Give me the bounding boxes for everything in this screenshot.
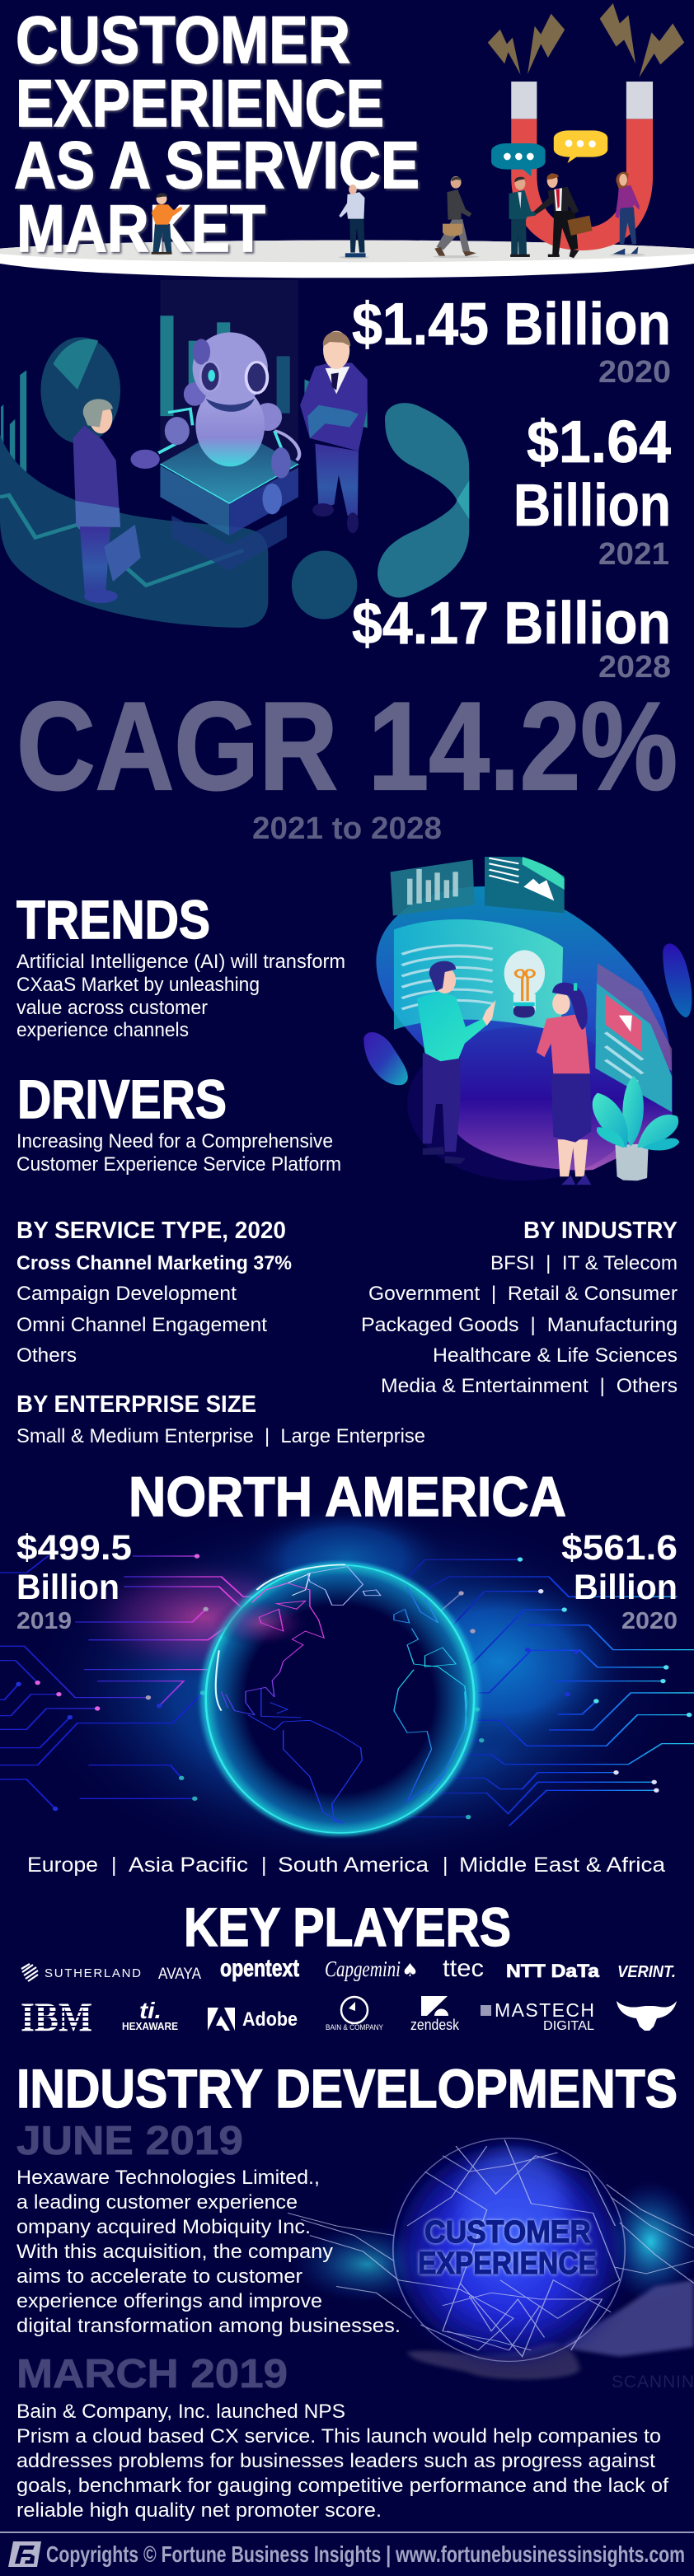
image text: customer experience (418, 2215, 597, 2281)
other regions list: Asia Pacific (129, 1854, 248, 1877)
person: left businessman with briefcase (73, 399, 141, 603)
header illustration: business people and speech bubbles (150, 130, 645, 259)
other regions list (27, 1854, 665, 1877)
drivers text: Customer Experience Service Platform (16, 1153, 341, 1176)
development: March 2019: goals, benchmark for gauging competitive performance and the lack of (16, 2475, 668, 2497)
market value 2021: 2021 (598, 537, 669, 572)
icon: lightbulb (504, 950, 545, 1017)
logo: Capgemini: Capgemini (325, 1957, 401, 1981)
north america value 2020: 2020 (621, 1608, 678, 1634)
development: March 2019: addresses problems for businesses leaders such as progress against (16, 2450, 655, 2472)
icon: yellow speech bubble (554, 130, 607, 163)
logo: OpenText: opentext (220, 1955, 299, 1982)
market value 2028: 2028 (598, 650, 671, 685)
other regions list: Europe (27, 1854, 98, 1877)
person: man pointing (417, 961, 495, 1164)
title: AS A SERVICE (14, 129, 420, 203)
title: CUSTOMER (16, 3, 350, 77)
segment list: by service type (16, 1218, 292, 1367)
logo: Bain and Company: BAIN & COMPANY (326, 2023, 383, 2031)
main text panel (394, 919, 563, 1032)
development: June 2019: a leading customer experience (16, 2191, 298, 2214)
logo: Sutherland: SUTHERLAND (45, 1966, 141, 1980)
logo: IBM: IBM (21, 1994, 92, 2040)
logo: TTEC: ttec (443, 1955, 484, 1982)
image text: customer experience: EXPERIENCE (418, 2246, 597, 2281)
logo: Adobe: Adobe (242, 2008, 298, 2031)
heading: trends: TRENDS (16, 889, 210, 950)
robot platform (160, 425, 298, 571)
logo: Bain and Company (326, 1997, 383, 2031)
heading: trends (16, 889, 345, 1041)
north america value 2019: $499.5 (16, 1528, 132, 1568)
market value 2021: Billion (513, 473, 671, 539)
development: June 2019: aims to accelerate to customer (16, 2265, 302, 2288)
development: March 2019: reliable high quality net promoter score. (16, 2499, 382, 2522)
illustration: glowing globe with circuit lines (0, 1502, 694, 1876)
segment list: by service type: Cross Channel Marketing 37% (16, 1252, 292, 1274)
market value 2020: $1.45 Billion (352, 292, 671, 358)
person: man in light shirt (339, 185, 369, 259)
icon: horseshoe magnet with lightning (488, 3, 684, 250)
development: June 2019: experience offerings and improve (16, 2290, 322, 2312)
chart panel (391, 859, 475, 916)
trends text: value across customer (16, 997, 208, 1019)
globe outline (205, 1564, 475, 1834)
logo: Hexaware: HEXAWARE (122, 2020, 178, 2032)
development: June 2019: With this acquisition, the company (16, 2241, 333, 2263)
other regions list: | (443, 1854, 448, 1877)
north america value 2019: Billion (16, 1568, 120, 1607)
trends text (16, 951, 345, 1041)
segment list: by industry: Healthcare & Life Sciences (433, 1344, 678, 1367)
circuit lines (0, 1555, 694, 1826)
heading: drivers (16, 1068, 341, 1176)
other regions list: | (261, 1854, 267, 1877)
north america value 2020 (561, 1528, 678, 1634)
segment list: by industry: Media & Entertainment | Others (381, 1375, 678, 1397)
heading: key players: KEY PLAYERS (184, 1896, 511, 1957)
segment list: by industry: BFSI | IT & Telecom (490, 1252, 678, 1274)
robot (130, 332, 299, 514)
segment list: by industry: Government | Retail & Consumer (368, 1283, 678, 1305)
document panel (485, 857, 565, 913)
development: June 2019: Hexaware Technologies Limited., (16, 2167, 320, 2189)
other regions list: | (111, 1854, 117, 1877)
CAGR headline: 2021 to 2028 (252, 811, 442, 846)
logo: Avaya: AVAYA (158, 1966, 201, 1983)
market value 2020 (352, 292, 671, 390)
segment list: by enterprise size: BY ENTERPRISE SIZE (16, 1391, 256, 1418)
development: June 2019: digital transformation among businesses. (16, 2315, 401, 2337)
person: man in black suit with briefcase (534, 174, 593, 258)
illustration: robot and businessmen on teal shapes (0, 280, 469, 628)
icon: potted plant (593, 1076, 679, 1180)
logo: Sutherland (21, 1964, 141, 1981)
logo: Zendesk: zendesk (410, 2017, 460, 2033)
north america value 2019: 2019 (16, 1608, 72, 1634)
image: customer experience hand-held network sphere (288, 2135, 694, 2379)
trends text: CXaaS Market by unleashing (16, 974, 260, 996)
logo: Verint: VERINT. (617, 1963, 676, 1981)
world map outlines (221, 1567, 467, 1823)
footer logo (8, 2541, 41, 2567)
person: right businessman (300, 331, 368, 533)
image text: customer experience: CUSTOMER (424, 2215, 591, 2250)
image text: faint scanning: SCANNIN (612, 2373, 694, 2391)
segment list: by service type: Omni Channel Engagement (16, 1314, 267, 1336)
logo: Mastech Digital (481, 1999, 594, 2033)
logo: Hexaware: ti. (139, 1998, 162, 2023)
logo: Capgemini: ♠ (401, 1961, 419, 1981)
logo: Zendesk (410, 1996, 460, 2033)
header illustration base: stage platform (0, 241, 694, 278)
segment list: by service type: Others (16, 1344, 77, 1367)
development: June 2019 (16, 2119, 401, 2337)
north america value 2020: Billion (574, 1568, 678, 1607)
market value 2020: 2020 (598, 355, 671, 390)
logo: Mastech Digital: MASTECH (495, 1999, 594, 2021)
drivers text (16, 1130, 341, 1176)
person: walking man with bag (433, 176, 479, 258)
network lines (288, 2138, 694, 2361)
heading: north america: NORTH AMERICA (129, 1466, 566, 1528)
north america value 2020: $561.6 (561, 1528, 678, 1568)
logo: longhorn (617, 2001, 677, 2031)
icon: blue speech bubble (491, 143, 546, 176)
logo: Mastech Digital: DIGITAL (543, 2019, 594, 2033)
person: man in orange shirt (150, 193, 182, 255)
market value 2021: $1.64 (527, 409, 671, 475)
logo: NTT Data: NTT DaTa (506, 1961, 600, 1981)
market value 2028 (352, 591, 671, 685)
key player logos (18, 1955, 677, 2040)
trends text: experience channels (16, 1019, 189, 1041)
development: March 2019 (16, 2352, 668, 2522)
person: woman in purple top (610, 172, 645, 256)
heading: drivers: DRIVERS (17, 1068, 227, 1129)
illustration: people at idea lightbulb dashboard (363, 857, 692, 1185)
title (14, 3, 420, 266)
development: June 2019: ompany acquired Mobiquity Inc. (16, 2216, 311, 2238)
person: man in teal suit (509, 177, 538, 257)
development: June 2019: JUNE 2019 (16, 2119, 243, 2163)
segment list: by industry: Packaged Goods | Manufacturing (361, 1314, 678, 1336)
trends text: Artificial Intelligence (AI) will transform (16, 951, 345, 973)
development: March 2019: Prism a cloud based CX service. This launch would help companies to (16, 2425, 661, 2447)
development: March 2019: Bain & Company, Inc. launched NPS (16, 2401, 345, 2423)
decorative floating blobs (363, 943, 692, 1085)
segment list: by industry: BY INDUSTRY (523, 1218, 678, 1244)
teal backdrop shape (0, 434, 268, 628)
market value 2021 (513, 409, 671, 572)
drivers text: Increasing Need for a Comprehensive (16, 1130, 333, 1152)
market value 2028: $4.17 Billion (352, 591, 671, 657)
segment list: by enterprise size (16, 1391, 425, 1447)
right side panel (595, 963, 672, 1112)
person: woman in pink (537, 983, 591, 1185)
title: EXPERIENCE (16, 67, 384, 141)
segment list: by service type: Campaign Development (16, 1283, 237, 1305)
segment list: by industry (361, 1218, 678, 1397)
logo: Hexaware (122, 1998, 178, 2032)
logo: Adobe (208, 2008, 298, 2031)
other regions list: South America (278, 1854, 429, 1877)
circuit end dots (16, 1554, 692, 1819)
segment list: by enterprise size: Small & Medium Enterprise | Large Enterprise (16, 1425, 425, 1447)
development: March 2019: MARCH 2019 (16, 2352, 288, 2396)
segment list: by service type: BY SERVICE TYPE, 2020 (16, 1218, 286, 1244)
other regions list: Middle East & Africa (459, 1854, 665, 1877)
north america value 2019 (16, 1528, 132, 1634)
title: MARKET (16, 192, 265, 266)
